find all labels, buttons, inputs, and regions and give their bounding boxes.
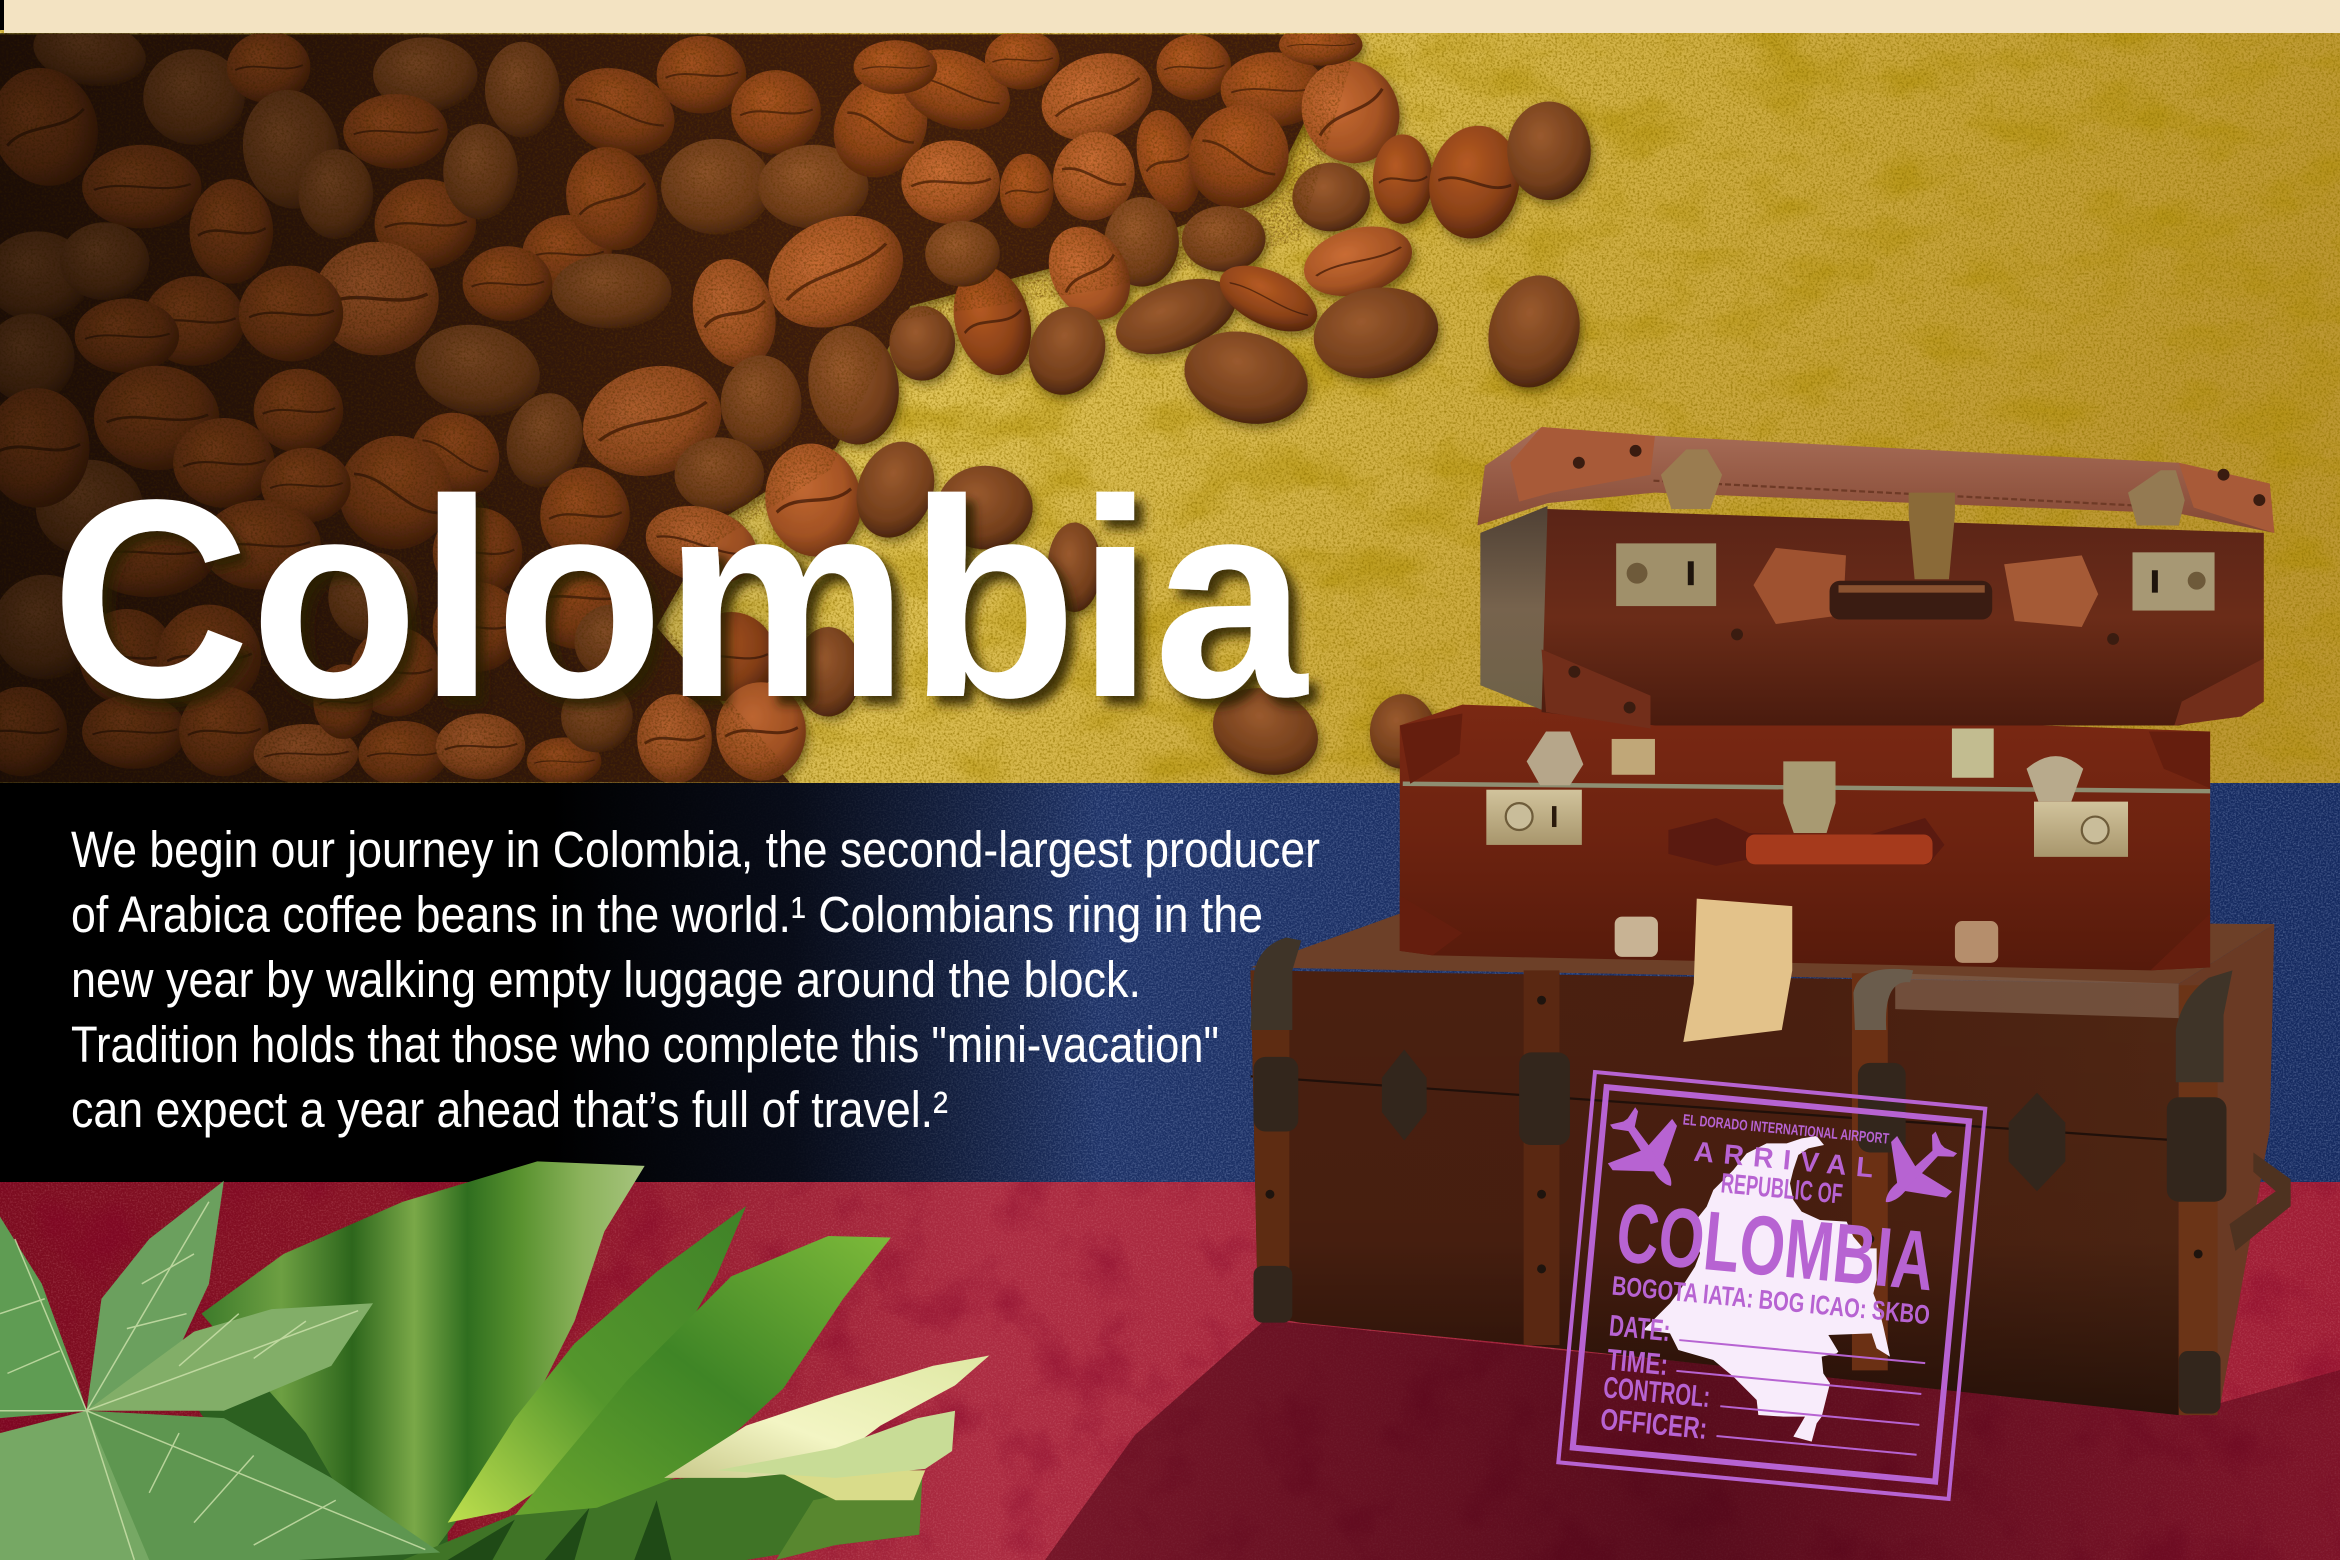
- tropical leaves: [0, 1161, 989, 1560]
- hardware: iron hasps: [1254, 1049, 2227, 1414]
- stamp frames and text: ARRIVAL: [1693, 1136, 1875, 1183]
- coffee beans: [0, 10, 1592, 789]
- leaf: narrow blade: [448, 1206, 746, 1523]
- bean speckle texture: [0, 33, 1360, 783]
- leaf: dark base fill: [179, 1314, 448, 1560]
- suitcase: top case: [1477, 427, 2274, 728]
- icon: left plane: [1590, 1094, 1703, 1208]
- leaf: star castor leaf: [0, 1181, 440, 1560]
- luggage tag: [1683, 899, 1792, 1042]
- intro paragraph: We begin our journey in Colombia, the second-largest producer: [71, 821, 1320, 878]
- intro paragraph: [71, 821, 1320, 1138]
- trunk rivets: [1265, 996, 2203, 1273]
- leaf: pale second tip: [716, 1411, 955, 1478]
- leaf: cream tip: [664, 1355, 989, 1478]
- leaf: lower dark frond: [403, 1470, 922, 1560]
- suitcase: bottom trunk: [1251, 914, 2291, 1415]
- background: red flag band: [0, 1182, 2340, 1560]
- stamp frames and text: EL DORADO INTERNATIONAL AIRPORT: [1682, 1111, 1890, 1148]
- title: Colombia: [51, 441, 1309, 756]
- stamp frames and text: CONTROL:: [1602, 1371, 1712, 1414]
- stamp frames and text: REPUBLIC OF: [1720, 1167, 1844, 1210]
- icon: right plane: [1858, 1115, 1974, 1230]
- intro paragraph: of Arabica coffee beans in the world.¹ Colombians ring in the: [71, 886, 1263, 943]
- side handle: [2229, 1152, 2291, 1251]
- stamp frames and text: TIME:: [1606, 1343, 1669, 1382]
- suitcase stack: [1251, 427, 2291, 1415]
- stamp frames and text: BOGOTA IATA: BOG ICAO: SKBO: [1611, 1271, 1931, 1330]
- intro paragraph: can expect a year ahead that’s full of travel.²: [71, 1081, 948, 1138]
- stamp frames and text: [1558, 1072, 1985, 1499]
- map of Colombia: [1643, 1136, 1890, 1442]
- leaf: large central leaf: [201, 1161, 645, 1553]
- leaf: wide blade: [515, 1236, 891, 1515]
- stamp frames and text: COLOMBIA: [1613, 1185, 1938, 1308]
- metal corner caps: [1251, 937, 2232, 1082]
- stamp frames and text: DATE:: [1608, 1310, 1672, 1348]
- background: blue flag band: [0, 783, 2340, 1183]
- top cream strip: [4, 0, 2340, 33]
- intro paragraph: new year by walking empty luggage around the block.: [71, 951, 1141, 1008]
- dark fade over left beans: [0, 33, 850, 783]
- background: yellow flag band: [0, 30, 2340, 785]
- passport stamp: [1558, 1072, 1985, 1499]
- shadow under suitcases: [1045, 1320, 2340, 1560]
- intro paragraph: Tradition holds that those who complete this "mini-vacation": [71, 1016, 1219, 1073]
- stamp frames and text: OFFICER:: [1599, 1403, 1709, 1446]
- suitcase: middle case: [1400, 705, 2210, 970]
- leaf: pale lower band: [776, 1470, 925, 1500]
